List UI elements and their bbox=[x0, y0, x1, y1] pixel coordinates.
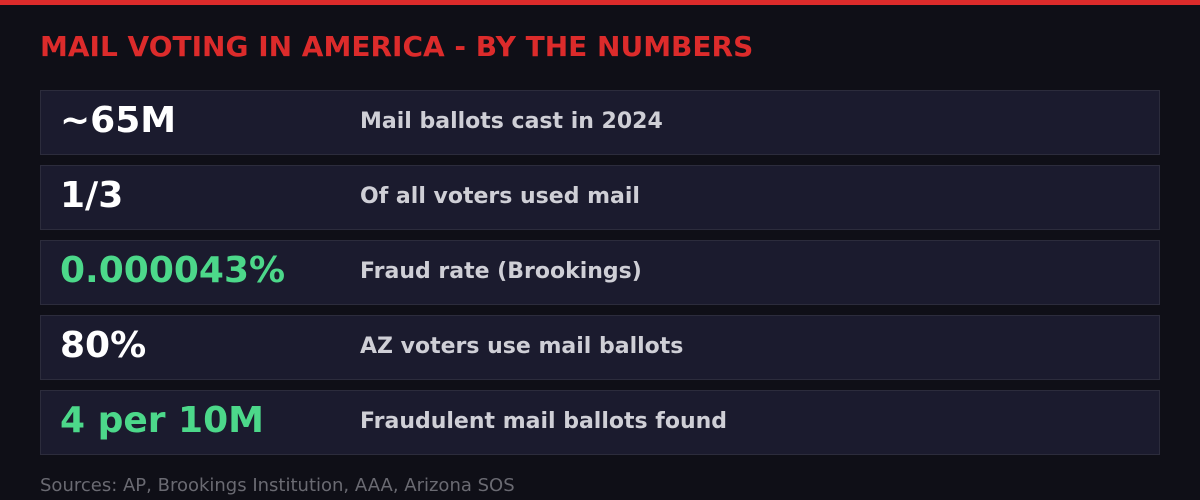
row: fraudulent ballots: 4 per 10M bbox=[60, 400, 264, 441]
row: one third: Of all voters used mail bbox=[360, 184, 640, 209]
row: fraud rate: Fraud rate (Brookings) bbox=[360, 259, 642, 284]
sources: Sources: AP, Brookings Institution, AAA, Arizona SOS bbox=[40, 475, 515, 496]
row: mail ballots: ~65M bbox=[60, 100, 176, 141]
row: fraud rate bbox=[40, 240, 1160, 305]
row: mail ballots bbox=[40, 90, 1160, 155]
row: fraud rate: 0.000043% bbox=[60, 250, 285, 291]
row: fraudulent ballots: Fraudulent mail ballots found bbox=[360, 409, 727, 434]
row: AZ voters: 80% bbox=[60, 325, 146, 366]
row: AZ voters bbox=[40, 315, 1160, 380]
row: AZ voters: AZ voters use mail ballots bbox=[360, 334, 683, 359]
row: fraudulent ballots bbox=[40, 390, 1160, 455]
row: one third: 1/3 bbox=[60, 175, 123, 216]
row: one third bbox=[40, 165, 1160, 230]
title: MAIL VOTING IN AMERICA - BY THE NUMBERS bbox=[40, 30, 753, 63]
row: mail ballots: Mail ballots cast in 2024 bbox=[360, 109, 663, 134]
